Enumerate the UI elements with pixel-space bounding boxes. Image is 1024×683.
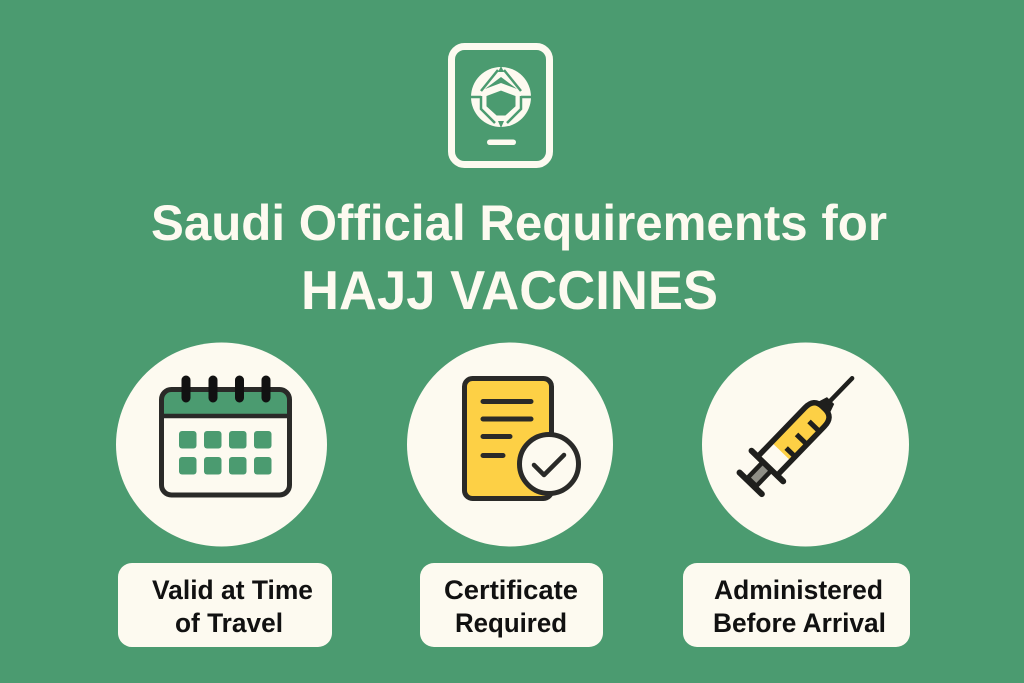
- label: valid at time of travel: [118, 563, 332, 647]
- icon: calendar: [161, 380, 290, 495]
- panel: valid at time of travel: [116, 342, 332, 647]
- label: certificate required: [420, 563, 603, 647]
- panel: certificate required: [407, 342, 613, 647]
- label: certificate required: Required: [455, 608, 567, 638]
- icon: syringe: [735, 363, 868, 499]
- label: valid at time of travel: Valid at Time: [152, 575, 313, 605]
- icon: passport: [452, 46, 550, 164]
- panel: administered before arrival: [683, 342, 910, 647]
- icon circle: certificate: [407, 342, 613, 546]
- label: administered before arrival: Before Arrival: [713, 608, 886, 638]
- title: [151, 195, 887, 321]
- title: Saudi Official Requirements for: [151, 195, 887, 251]
- label: valid at time of travel: of Travel: [175, 608, 283, 638]
- icon: certificate with check mark: [464, 378, 578, 498]
- title: HAJJ VACCINES: [301, 259, 718, 321]
- icon circle: syringe: [702, 342, 909, 546]
- label: administered before arrival: [683, 563, 910, 647]
- icon circle: calendar: [116, 342, 327, 546]
- label: certificate required: Certificate: [444, 575, 578, 605]
- label: administered before arrival: Administered: [714, 575, 883, 605]
